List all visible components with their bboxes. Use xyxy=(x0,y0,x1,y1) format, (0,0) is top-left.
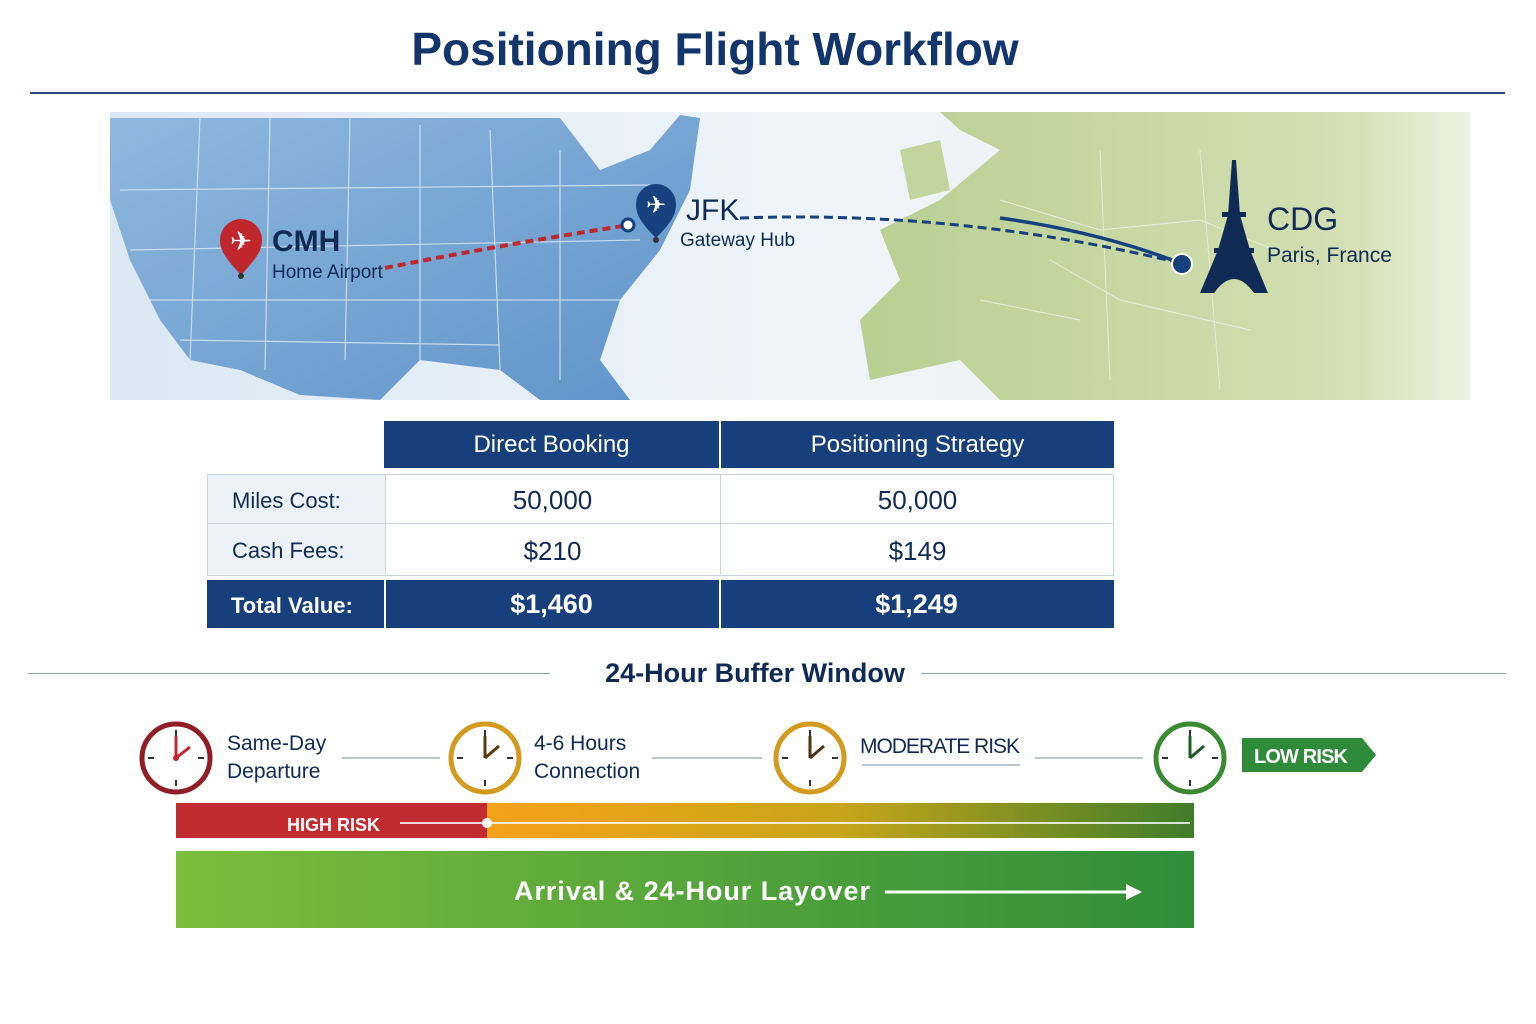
clock: low risk xyxy=(1156,724,1224,792)
row: total value: Total Value: xyxy=(231,593,353,618)
US landmass xyxy=(110,115,700,400)
table header: Positioning Strategy xyxy=(811,431,1024,458)
label: CDG: Paris, France xyxy=(1267,244,1392,267)
layover bar: Arrival & 24-Hour Layover xyxy=(514,876,870,906)
Europe landmass xyxy=(860,112,1470,400)
row: cash fees: $210 xyxy=(524,536,581,566)
clock: same-day xyxy=(142,724,210,792)
title: Positioning Flight Workflow xyxy=(411,23,1019,75)
section heading: buffer window: 24-Hour Buffer Window xyxy=(605,658,905,688)
table header xyxy=(384,421,1114,468)
map xyxy=(110,112,1470,400)
label: 4-6 hours connection: 4-6 Hours xyxy=(534,732,626,755)
risk bar: HIGH RISK xyxy=(287,815,380,835)
label: moderate risk: MODERATE RISK xyxy=(860,735,1020,758)
comparison table xyxy=(207,421,1114,628)
pin: JFK xyxy=(636,184,676,243)
label: CDG: CDG xyxy=(1267,201,1338,237)
row: cash fees: $149 xyxy=(889,536,946,566)
row: miles cost xyxy=(207,474,1114,524)
label: 4-6 hours connection: Connection xyxy=(534,760,640,783)
row: cash fees xyxy=(207,524,1114,576)
label: JFK: JFK xyxy=(686,194,739,227)
tag: low risk: LOW RISK xyxy=(1254,746,1349,768)
label: CMH: CMH xyxy=(272,225,340,258)
clock: moderate xyxy=(776,724,844,792)
pin: JFK: ✈ xyxy=(646,192,666,219)
row: miles cost: 50,000 xyxy=(513,485,592,515)
label: JFK xyxy=(680,194,795,251)
row: total value xyxy=(207,580,1114,628)
pin: CMH xyxy=(220,219,262,279)
label: CMH xyxy=(272,225,384,283)
table header: Direct Booking xyxy=(473,431,630,458)
pin: CMH: ✈ xyxy=(230,226,252,256)
label: same-day departure xyxy=(227,732,327,783)
row: total value: $1,249 xyxy=(875,589,958,619)
label: same-day departure: Departure xyxy=(227,760,320,783)
timeline xyxy=(140,722,1376,928)
clock: 4-6 hours xyxy=(451,724,519,792)
tag: low risk xyxy=(1242,738,1376,772)
risk bar xyxy=(176,803,1194,838)
label: 4-6 hours connection xyxy=(534,732,640,783)
label: CDG xyxy=(1267,201,1392,267)
label: same-day departure: Same-Day xyxy=(227,732,327,755)
route: CMH to JFK xyxy=(385,226,623,268)
row: total value: $1,460 xyxy=(510,589,593,619)
icon: Eiffel tower xyxy=(1200,160,1268,293)
row: cash fees: Cash Fees: xyxy=(232,538,344,563)
label: CMH: Home Airport xyxy=(272,262,384,283)
route: JFK to CDG xyxy=(740,217,1180,263)
layover bar xyxy=(176,851,1194,928)
row: miles cost: 50,000 xyxy=(878,485,957,515)
label: JFK: Gateway Hub xyxy=(680,230,795,251)
row: miles cost: Miles Cost: xyxy=(232,488,341,513)
